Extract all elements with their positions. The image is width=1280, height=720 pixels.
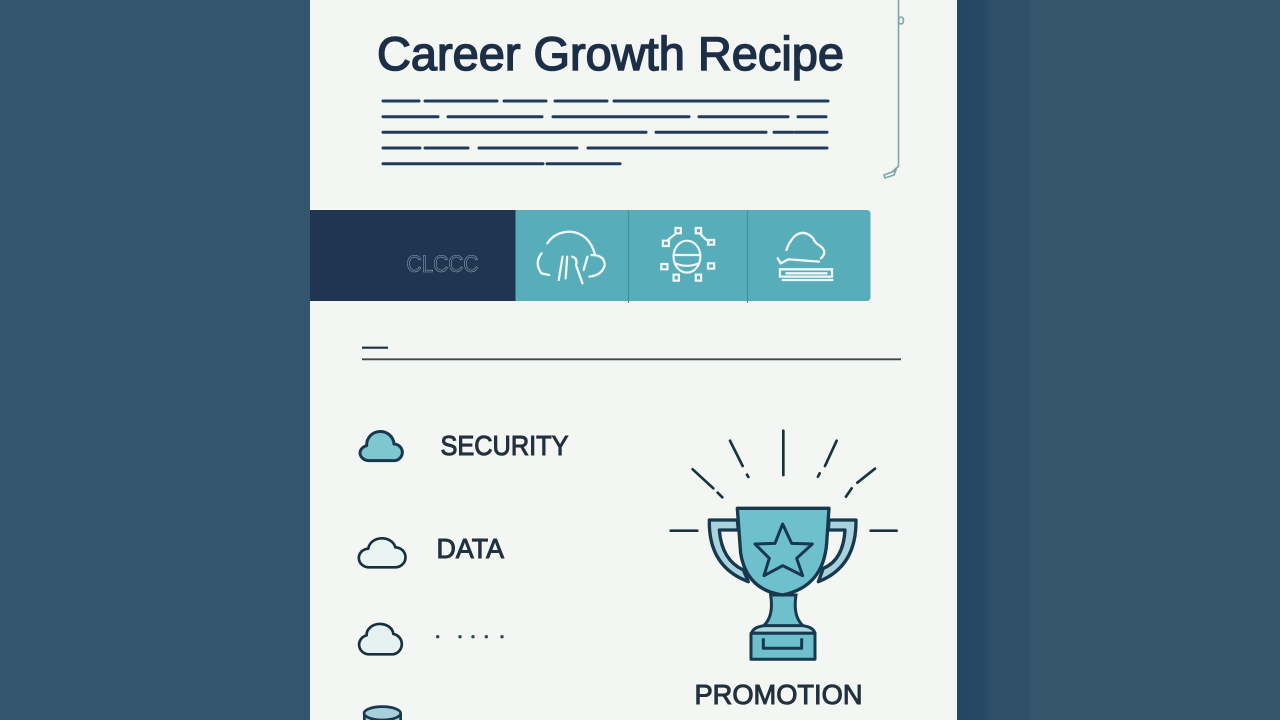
icon: cloud over platform (778, 233, 832, 280)
section rule (362, 348, 901, 359)
background: left (0, 0, 310, 720)
background: right (957, 0, 1280, 720)
icon: cloud with tools (538, 232, 605, 283)
text block: placeholder lines (383, 101, 828, 164)
band: navy label block (310, 210, 516, 301)
title: Career Growth Recipe (377, 27, 844, 80)
icon: data cloud (359, 538, 405, 567)
label: dotted placeholder (436, 635, 504, 638)
hook line (884, 0, 904, 178)
icon: third cloud (359, 624, 402, 654)
trophy handles (709, 520, 856, 582)
trophy cup (737, 508, 829, 595)
icon: trophy with rays (671, 431, 897, 659)
list: skills (359, 430, 569, 720)
label: promotion: PROMOTION (694, 679, 862, 710)
trophy base (751, 626, 815, 659)
label: data: DATA (436, 533, 504, 564)
panel: recipe card (310, 0, 957, 720)
icon: network head (661, 228, 714, 281)
band: teal icon strip (516, 210, 870, 303)
trophy stem (763, 595, 803, 626)
label: security: SECURITY (440, 430, 569, 461)
icon: security cloud (360, 431, 402, 461)
rays (671, 431, 897, 531)
icon: cylinder (364, 707, 401, 720)
band label: CLCCC (406, 251, 478, 278)
trophy star (755, 524, 812, 576)
